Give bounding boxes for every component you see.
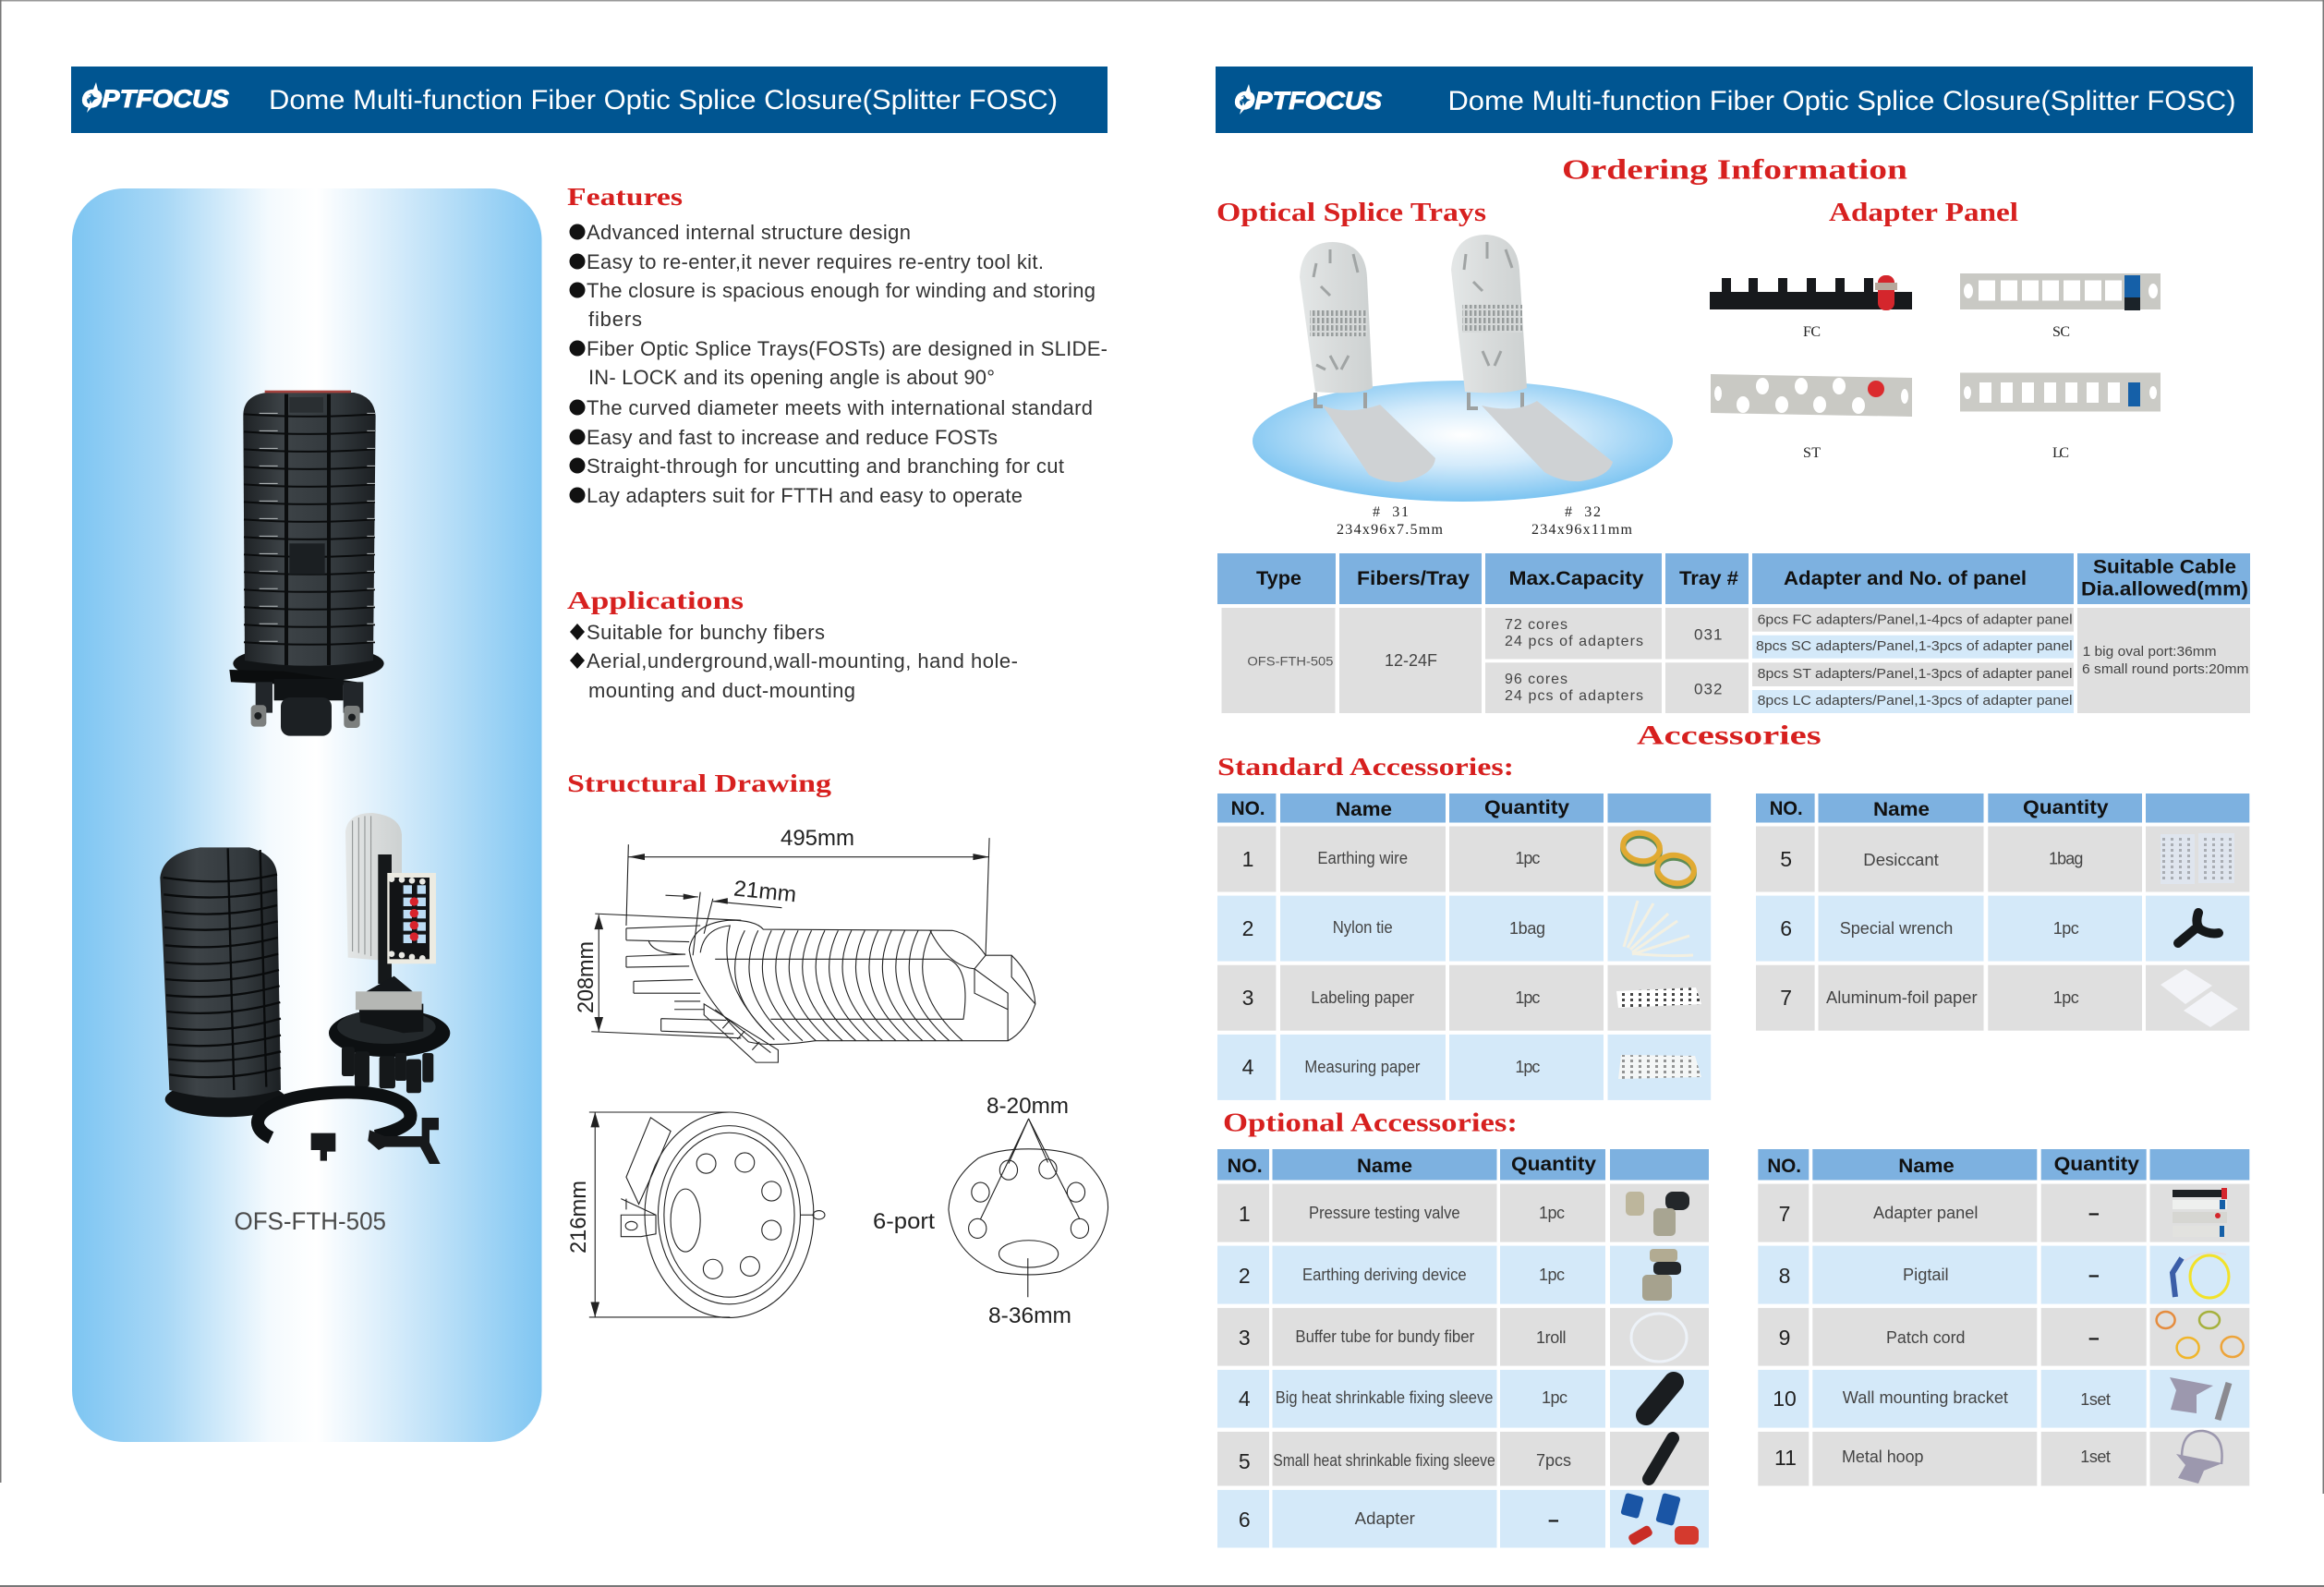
icon: pigtail	[2173, 1253, 2229, 1298]
row 8: pigtail	[1758, 1246, 2249, 1304]
row 2: earthing deriving device: Earthing deriving device	[1302, 1266, 1467, 1284]
logo: OPTFOCUS: OPTFOCUS	[81, 85, 229, 113]
row 7: aluminum-foil paper: 1pc	[2053, 988, 2079, 1007]
table header row: Tray #	[1679, 568, 1738, 589]
drawing: closure base top view	[589, 1112, 825, 1317]
icon: desiccant bags	[2161, 833, 2234, 884]
row 2: nylon tie: Nylon tie	[1333, 918, 1393, 937]
row 11: metal hoop: Metal hoop	[1842, 1448, 1923, 1466]
feature list text: Lay adapters suit for FTTH and easy to operate	[587, 484, 1023, 507]
table header row: Suitable Cable	[2093, 556, 2236, 578]
table: optional accessories right	[1758, 1149, 2249, 1485]
row 7: adapter panel: –	[2088, 1203, 2100, 1224]
row 4: big sleeve: 1pc	[1542, 1388, 1567, 1407]
row 9: patch cord: Patch cord	[1886, 1328, 1966, 1347]
heading: applications: Applications	[567, 587, 744, 614]
header row	[1756, 794, 2249, 822]
icon: bracket	[2170, 1377, 2229, 1420]
row 7: adapter panel	[1758, 1184, 2249, 1242]
header row	[1758, 1149, 2249, 1181]
table body: 72 cores	[1505, 617, 1567, 633]
header row	[1217, 1149, 1709, 1181]
heading: accessories: Accessories	[1637, 721, 1822, 750]
adapter panel: LC: LC	[2052, 445, 2069, 461]
heading: features: Features	[567, 183, 683, 211]
drawing: side view with dimensions	[591, 838, 1035, 1062]
dimension: 8-20mm: 8-20mm	[986, 1094, 1069, 1119]
row 3: buffer tube: Buffer tube for bundy fiber	[1295, 1327, 1474, 1346]
tray labels: # 31	[1373, 504, 1409, 520]
tray #31	[1300, 242, 1435, 482]
row 5: desiccant: 1bag	[2049, 850, 2083, 868]
adapter panel: SC: SC	[2052, 324, 2070, 340]
icon: labeling paper	[1616, 987, 1701, 1008]
row 3: buffer tube	[1217, 1308, 1709, 1366]
row 2: nylon tie	[1217, 896, 1711, 962]
tray labels: 234x96x7.5mm	[1337, 522, 1444, 538]
feature bullets	[569, 224, 586, 503]
row 6: adapter: Adapter	[1355, 1509, 1415, 1528]
table: standard accessories left	[1217, 794, 1711, 1100]
heading: adapter panel: Adapter Panel	[1829, 199, 2018, 227]
feature list text: fibers	[588, 308, 642, 331]
heading: optional accessories: Optional Accessories:	[1223, 1109, 1518, 1138]
header row	[1217, 794, 1711, 822]
table header row: Dia.allowed(mm)	[2081, 578, 2248, 600]
tray labels: # 32	[1565, 504, 1601, 520]
icon: earthing device	[1642, 1249, 1681, 1301]
row 3: labeling paper: 1pc	[1515, 988, 1540, 1007]
row 2: earthing deriving device: 1pc	[1539, 1266, 1565, 1284]
row 1: earthing wire	[1217, 826, 1711, 892]
section: features	[567, 183, 1108, 507]
header row: Quantity	[1484, 797, 1569, 818]
feature list text: Easy and fast to increase and reduce FOSTs	[587, 426, 998, 449]
right header title: Dome Multi-function Fiber Optic Splice Closure(Splitter FOSC)	[1448, 86, 2235, 116]
row 5: desiccant: Desiccant	[1863, 851, 1939, 869]
adapter panel: SC	[1960, 273, 2161, 340]
left header banner	[71, 67, 1108, 133]
table body: 032	[1694, 680, 1722, 698]
header row: NO.	[1231, 798, 1265, 819]
row 9: patch cord: –	[2088, 1327, 2100, 1349]
table body: OFS-FTH-505	[1247, 654, 1334, 669]
row 6: special wrench: 1pc	[2053, 919, 2079, 938]
feature list text	[587, 221, 1108, 507]
header row: NO.	[1228, 1156, 1263, 1177]
application list text: Aerial,underground,wall-mounting, hand hole-	[587, 649, 1018, 672]
row 1: pressure testing valve: 1	[1239, 1202, 1251, 1226]
row 6: adapter: 6	[1239, 1508, 1251, 1532]
row 1: pressure testing valve	[1217, 1184, 1709, 1242]
table body	[1221, 608, 2250, 713]
blue ellipse backdrop	[1253, 381, 1673, 502]
header row: Name	[1898, 1156, 1955, 1177]
product: opened closure with trays and clamp	[160, 813, 450, 1164]
header row: Quantity	[2023, 797, 2109, 818]
panel: product photo	[72, 188, 541, 1442]
row 4: measuring paper: 4	[1242, 1055, 1254, 1079]
icon: adapters	[1620, 1493, 1699, 1546]
feature list text: IN- LOCK and its opening angle is about 90°	[588, 366, 995, 389]
tray labels	[1337, 504, 1633, 538]
table header row: Max.Capacity	[1509, 568, 1644, 589]
section: structural drawing	[566, 769, 1108, 1328]
section: applications	[567, 587, 1018, 702]
row 7: adapter panel: 7	[1779, 1202, 1790, 1226]
header row: Name	[1873, 799, 1930, 820]
table body: 8pcs SC adapters/Panel,1-3pcs of adapter panel	[1756, 638, 2073, 654]
row 9: patch cord: 9	[1779, 1326, 1790, 1350]
dimension: 21mm: 21mm	[732, 876, 797, 907]
row 4: measuring paper: 1pc	[1515, 1058, 1540, 1076]
row 1: earthing wire: 1pc	[1515, 849, 1540, 867]
icon: hoop	[2176, 1431, 2222, 1484]
header row: NO.	[1770, 798, 1803, 819]
row 11: metal hoop: 1set	[2080, 1448, 2111, 1466]
row 7: aluminum-foil paper	[1756, 965, 2249, 1031]
row 8: pigtail: 8	[1779, 1264, 1790, 1288]
dimension: 216mm: 216mm	[566, 1181, 591, 1254]
product: closed dome closure	[229, 391, 384, 736]
icon: foil sheets	[2161, 969, 2238, 1027]
row 7: aluminum-foil paper: 7	[1780, 986, 1792, 1010]
drawing: 6-port diagram	[949, 1119, 1108, 1297]
row 6: special wrench: Special wrench	[1840, 919, 1953, 938]
header row: Quantity	[1511, 1154, 1596, 1175]
row 2: nylon tie: 2	[1242, 916, 1253, 940]
row 7: adapter panel: Adapter panel	[1873, 1204, 1978, 1222]
row 2: earthing deriving device	[1217, 1246, 1709, 1304]
icon: coiled wires	[1621, 830, 1696, 889]
tray #32	[1451, 235, 1613, 481]
row 2: nylon tie: 1bag	[1509, 919, 1545, 938]
logo: OPTFOCUS: OPTFOCUS	[1234, 87, 1382, 115]
table body: 96 cores	[1505, 672, 1567, 687]
table: ordering specifications	[1217, 553, 2250, 713]
icon: tube coil	[1631, 1314, 1687, 1362]
row 10: wall mounting bracket	[1758, 1370, 2249, 1428]
row 4: big sleeve: 4	[1239, 1387, 1251, 1411]
row 3: labeling paper: Labeling paper	[1311, 988, 1414, 1007]
row 9: patch cord	[1758, 1308, 2249, 1366]
dimension: 495mm: 495mm	[781, 826, 854, 851]
adapter panel: LC	[1960, 373, 2161, 461]
row 10: wall mounting bracket: 10	[1773, 1387, 1797, 1411]
row 10: wall mounting bracket: 1set	[2080, 1390, 2111, 1409]
row 6: adapter	[1217, 1490, 1709, 1548]
dimension: 8-36mm: 8-36mm	[988, 1303, 1071, 1328]
feature list text: The closure is spacious enough for winding and storing	[587, 279, 1095, 302]
row 4: measuring paper: Measuring paper	[1304, 1058, 1420, 1076]
row 4: big sleeve	[1217, 1370, 1709, 1428]
section: optical splice trays	[1216, 199, 1673, 538]
row 5: desiccant	[1756, 826, 2249, 892]
adapter panel: FC: FC	[1803, 324, 1821, 340]
heading: standard accessories: Standard Accessories:	[1217, 753, 1514, 781]
row 10: wall mounting bracket: Wall mounting bracket	[1843, 1388, 2008, 1407]
adapter panel: FC	[1710, 275, 1912, 340]
table body: 24 pcs of adapters	[1505, 634, 1643, 649]
row 7: aluminum-foil paper: Aluminum-foil paper	[1826, 988, 1978, 1007]
feature list text: Easy to re-enter,it never requires re-entry tool kit.	[587, 250, 1044, 273]
adapter panel: ST: ST	[1803, 445, 1821, 461]
icon: nylon ties	[1624, 901, 1693, 956]
row 5: small sleeve: 7pcs	[1536, 1451, 1571, 1470]
row 6: adapter: –	[1548, 1509, 1559, 1531]
icon: wrench	[2178, 913, 2219, 943]
table body: 6 small round ports:20mm	[2082, 661, 2248, 677]
header row: NO.	[1767, 1156, 1801, 1177]
row 5: small sleeve: 5	[1239, 1449, 1251, 1473]
row 1: earthing wire: Earthing wire	[1317, 849, 1408, 867]
table body: 8pcs LC adapters/Panel,1-3pcs of adapter panel	[1758, 693, 2073, 709]
table header row	[1217, 553, 2250, 604]
table body: 8pcs ST adapters/Panel,1-3pcs of adapter panel	[1758, 666, 2073, 682]
icon: mini adapter panels	[2173, 1188, 2227, 1237]
row 3: labeling paper: 3	[1242, 986, 1253, 1010]
row 6: special wrench	[1756, 896, 2249, 962]
heading: ordering information: Ordering Information	[1562, 153, 1907, 185]
heading: optical splice trays: Optical Splice Trays	[1216, 199, 1486, 227]
row 3: buffer tube: 3	[1239, 1326, 1251, 1350]
table header row: Type	[1256, 568, 1301, 589]
left header title: Dome Multi-function Fiber Optic Splice Closure(Splitter FOSC)	[269, 85, 1058, 115]
feature list text: Straight-through for uncutting and branching for cut	[587, 454, 1064, 478]
icon: valve	[1626, 1192, 1689, 1236]
icon: measuring paper	[1618, 1055, 1701, 1079]
application list text	[587, 621, 1018, 702]
header row: Name	[1357, 1156, 1412, 1177]
section: adapter panel	[1710, 199, 2161, 461]
row 5: small sleeve: Small heat shrinkable fixing sleeve	[1273, 1451, 1495, 1470]
row 6: special wrench: 6	[1780, 916, 1792, 940]
application list text: Suitable for bunchy fibers	[587, 621, 825, 644]
table header row: Fibers/Tray	[1357, 568, 1470, 589]
heading: structural drawing: Structural Drawing	[567, 769, 832, 797]
row 4: big sleeve: Big heat shrinkable fixing sleeve	[1276, 1388, 1493, 1407]
feature list text: Fiber Optic Splice Trays(FOSTs) are designed in SLIDE-	[587, 337, 1108, 360]
icon: big sleeve	[1646, 1382, 1674, 1415]
row 3: buffer tube: 1roll	[1536, 1328, 1567, 1347]
icon: patch cords	[2157, 1312, 2244, 1358]
row 8: pigtail: –	[2088, 1265, 2100, 1286]
label: 6-port: 6-port	[873, 1209, 935, 1234]
row 5: small sleeve	[1217, 1432, 1709, 1485]
table header row: Adapter and No. of panel	[1784, 568, 2027, 589]
row 11: metal hoop	[1758, 1431, 2249, 1485]
product model label: OFS-FTH-505	[235, 1207, 386, 1235]
row 11: metal hoop: 11	[1774, 1446, 1797, 1470]
feature list text: The curved diameter meets with international standard	[587, 396, 1093, 419]
header row: Quantity	[2054, 1154, 2139, 1175]
feature list text: Advanced internal structure design	[587, 221, 911, 244]
row 5: desiccant: 5	[1780, 847, 1792, 871]
row 8: pigtail: Pigtail	[1903, 1266, 1949, 1284]
table: standard accessories right	[1756, 794, 2249, 1031]
application bullets	[570, 624, 585, 669]
row 3: labeling paper	[1217, 965, 1711, 1031]
right header banner	[1216, 67, 2253, 133]
table body: 12-24F	[1385, 651, 1437, 670]
header row: Name	[1336, 799, 1392, 820]
row 1: pressure testing valve: 1pc	[1539, 1204, 1565, 1222]
table body: 1 big oval port:36mm	[2083, 644, 2217, 660]
row 2: earthing deriving device: 2	[1239, 1264, 1251, 1288]
row 1: pressure testing valve: Pressure testing valve	[1309, 1204, 1460, 1222]
icon: small sleeve	[1649, 1438, 1673, 1479]
tray labels: 234x96x11mm	[1531, 522, 1633, 538]
adapter panel: ST	[1711, 374, 1912, 461]
dimension: 208mm: 208mm	[574, 941, 599, 1013]
table body: 24 pcs of adapters	[1505, 688, 1643, 704]
row 4: measuring paper	[1217, 1035, 1711, 1100]
table body: 031	[1694, 626, 1722, 643]
row 1: earthing wire: 1	[1242, 847, 1253, 871]
table body: 6pcs FC adapters/Panel,1-4pcs of adapter panel	[1758, 612, 2073, 628]
application list text: mounting and duct-mounting	[588, 679, 855, 702]
table: optional accessories left	[1217, 1149, 1709, 1548]
